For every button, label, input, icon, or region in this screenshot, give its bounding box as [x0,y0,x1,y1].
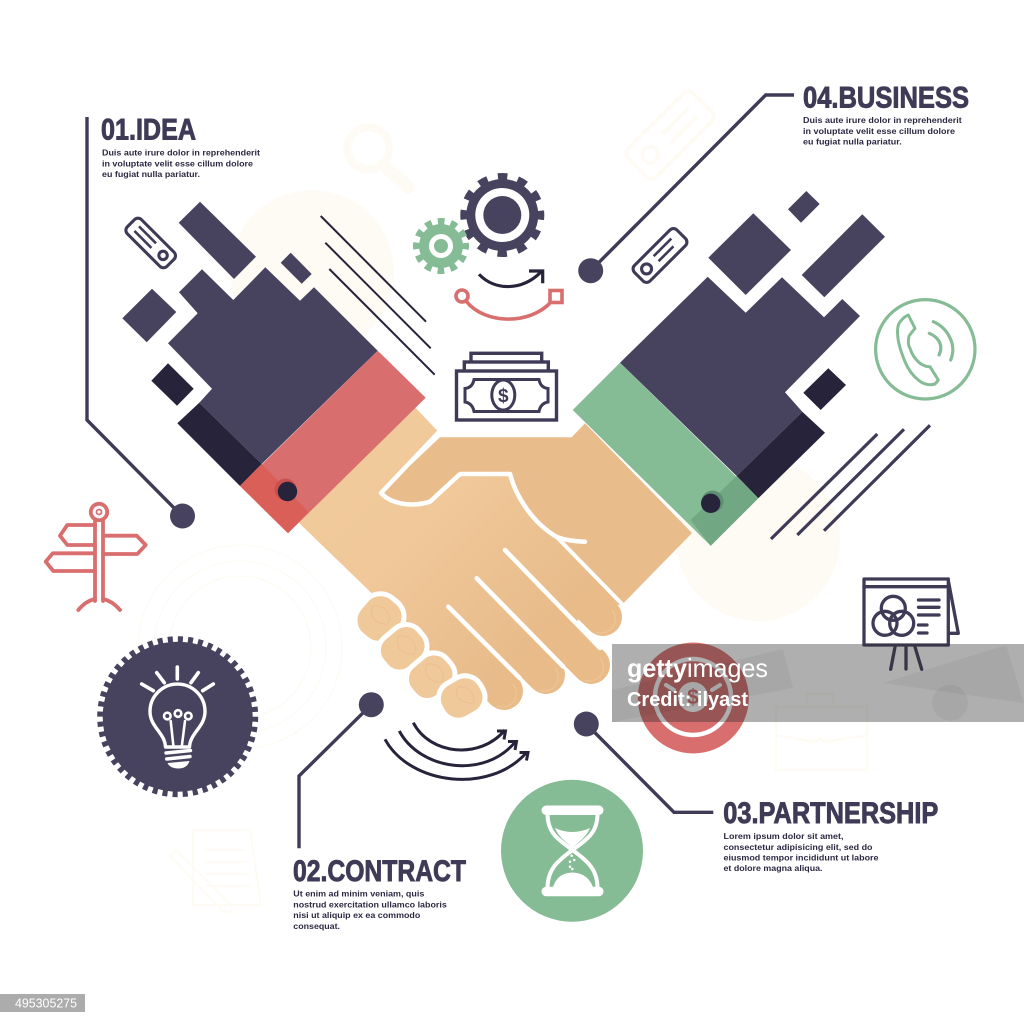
speed lines left [321,216,435,375]
cuff button [274,478,296,500]
heading and text: 04 business: eu fugiat nulla pariatur. [803,137,902,147]
watermark banner: Credit: ilyast [627,689,748,711]
wind arcs [385,723,528,779]
right hand [381,423,692,605]
icon: light bulb gear badge [101,640,255,794]
green cuff [573,363,758,546]
left sleeve [122,202,426,533]
icon: left id card [124,216,178,270]
heading and text: 03 partnership: 03.PARTNERSHIP [723,797,938,830]
icon: money stack [456,353,556,420]
heading and text: 04 business [803,82,969,147]
sleeve blocks [122,202,378,464]
heading and text: 03 partnership [723,797,938,873]
heading and text: 02 contract: consequat. [293,921,340,931]
red cuff [240,351,426,533]
heading and text: 04 business: in voluptate velit esse cillum dolore [803,126,955,136]
icon: dollar coin circle: $ [687,686,699,709]
heading and text: 04 business: Duis aute irure dolor in reprehenderit [803,115,962,125]
heading and text: 03 partnership: et dolore magna aliqua. [724,863,822,873]
cuff button [702,490,724,512]
gripping fingers [347,586,492,727]
white hand contour lines [381,433,622,678]
leader line 02 [299,692,384,848]
icon: curved arrow [479,271,543,287]
heading and text: 01 idea: 01.IDEA [101,114,196,146]
leader line 01 [87,117,195,528]
right sleeve [573,191,885,546]
image id tag: 495305275 [15,996,77,1010]
icon: presentation board [864,579,958,669]
heading and text: 02 contract: 02.CONTRACT [293,855,466,888]
watermark banner [612,644,1024,722]
heading and text: 02 contract: nostrud exercitation ullamco laboris [293,900,447,910]
heading and text: 01 idea [101,114,260,179]
icon: small green gear [416,222,466,270]
speed lines right [771,425,930,539]
heading and text: 01 idea: in voluptate velit esse cillum dolore [102,158,253,168]
heading and text: 01 idea: Duis aute irure dolor in reprehenderit [102,148,260,158]
leader line 04 [578,95,794,283]
heading and text: 02 contract: nisi ut aliquip ex ea commodo [293,910,420,920]
heading and text: 02 contract [293,855,466,931]
icon: phone [876,300,975,399]
icon: right id card [631,227,689,284]
handshake [296,402,692,727]
icon: hourglass circle [501,780,643,922]
money dollar sign: $ [498,386,509,407]
leader line 03 [574,712,713,812]
heading and text: 03 partnership: Lorem ipsum dolor sit amet, [724,831,844,841]
heading and text: 04 business: 04.BUSINESS [803,82,969,114]
icon: large gear [464,176,541,254]
left hand and fingers [296,402,622,727]
icon: dollar coin circle [638,642,749,754]
faint background icons [138,88,867,913]
image id tag [0,994,85,1012]
heading and text: 02 contract: Ut enim ad minim veniam, quis [293,888,425,898]
icon: red bezier curve [456,290,562,319]
finger nails [497,610,615,707]
heading and text: 03 partnership: eiusmod tempor incididunt ut labore [724,852,879,862]
heading and text: 03 partnership: consectetur adipisicing elit, sed do [724,842,872,852]
icon: signpost [46,504,146,610]
heading and text: 01 idea: eu fugiat nulla pariatur. [102,169,200,179]
watermark banner: gettyimages [627,653,768,683]
